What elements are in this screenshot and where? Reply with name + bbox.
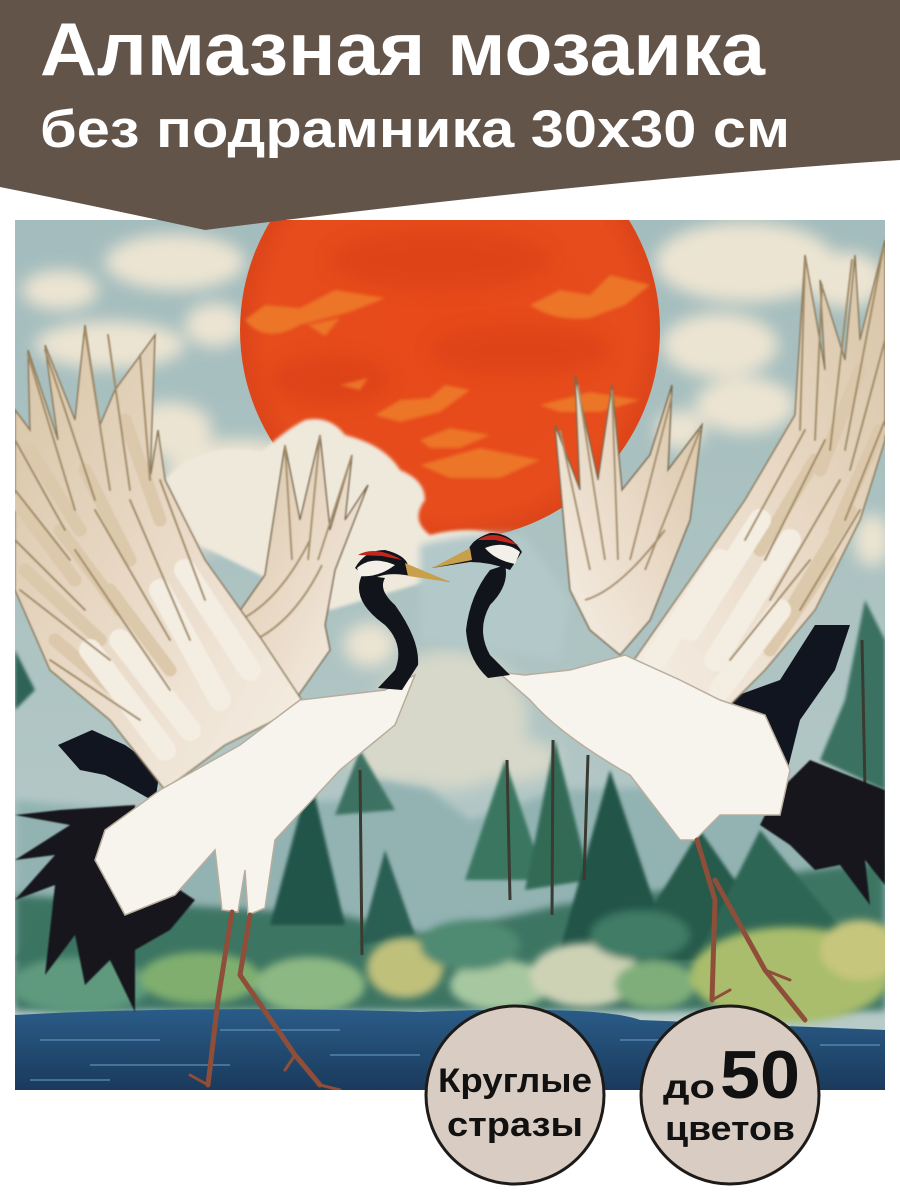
subtitle: без подрамника 30х30 см: [40, 100, 790, 159]
left crane: legs: [190, 912, 340, 1090]
left crane: black flight feathers: [58, 730, 160, 802]
header banner: [0, 0, 900, 230]
right crane: black flight feathers: [732, 625, 850, 766]
badge: up to 50 colours: [641, 1006, 819, 1184]
badge: round rhinestones: [426, 1006, 604, 1184]
left crane: neck: [359, 575, 418, 690]
artwork: dancing cranes and red sun: [15, 220, 885, 1090]
right crane: neck: [466, 565, 510, 678]
left crane: back wing: [232, 435, 368, 700]
sky: [15, 220, 885, 1090]
tree trunks: [360, 640, 865, 955]
badge: up to 50 colours: до: [663, 1068, 715, 1105]
pine trees: [15, 600, 885, 960]
badge: up to 50 colours: цветов: [665, 1110, 795, 1148]
right crane: front wing: [620, 240, 885, 710]
left crane: body: [95, 675, 415, 915]
shrubs: [10, 910, 900, 1023]
right crane: body: [498, 655, 790, 840]
badge: round rhinestones: Круглые: [438, 1062, 592, 1100]
badge: up to 50 colours: 50: [720, 1037, 800, 1113]
right crane: back wing: [555, 375, 702, 655]
left crane: wing feathers: [15, 330, 250, 750]
clouds: [22, 222, 890, 667]
grey cloud below the cranes: [350, 650, 560, 790]
right crane: [432, 240, 885, 1020]
distant forest: [15, 780, 885, 1010]
left crane: front wing: [15, 325, 305, 790]
right crane: wing feathers: [655, 250, 885, 690]
left crane: tail: [15, 805, 195, 1012]
left crane: head: [355, 550, 450, 582]
badge: round rhinestones: стразы: [447, 1106, 583, 1144]
title: Алмазная мозаика: [40, 7, 766, 91]
cloud in front of the sun: [165, 419, 500, 610]
left crane: [15, 325, 450, 1090]
red sun: [240, 220, 660, 537]
pale mist under the sun: [416, 528, 518, 584]
right crane: tail: [760, 760, 885, 905]
water: [15, 1009, 885, 1090]
right crane: head: [432, 533, 522, 570]
right crane: legs: [697, 840, 805, 1020]
